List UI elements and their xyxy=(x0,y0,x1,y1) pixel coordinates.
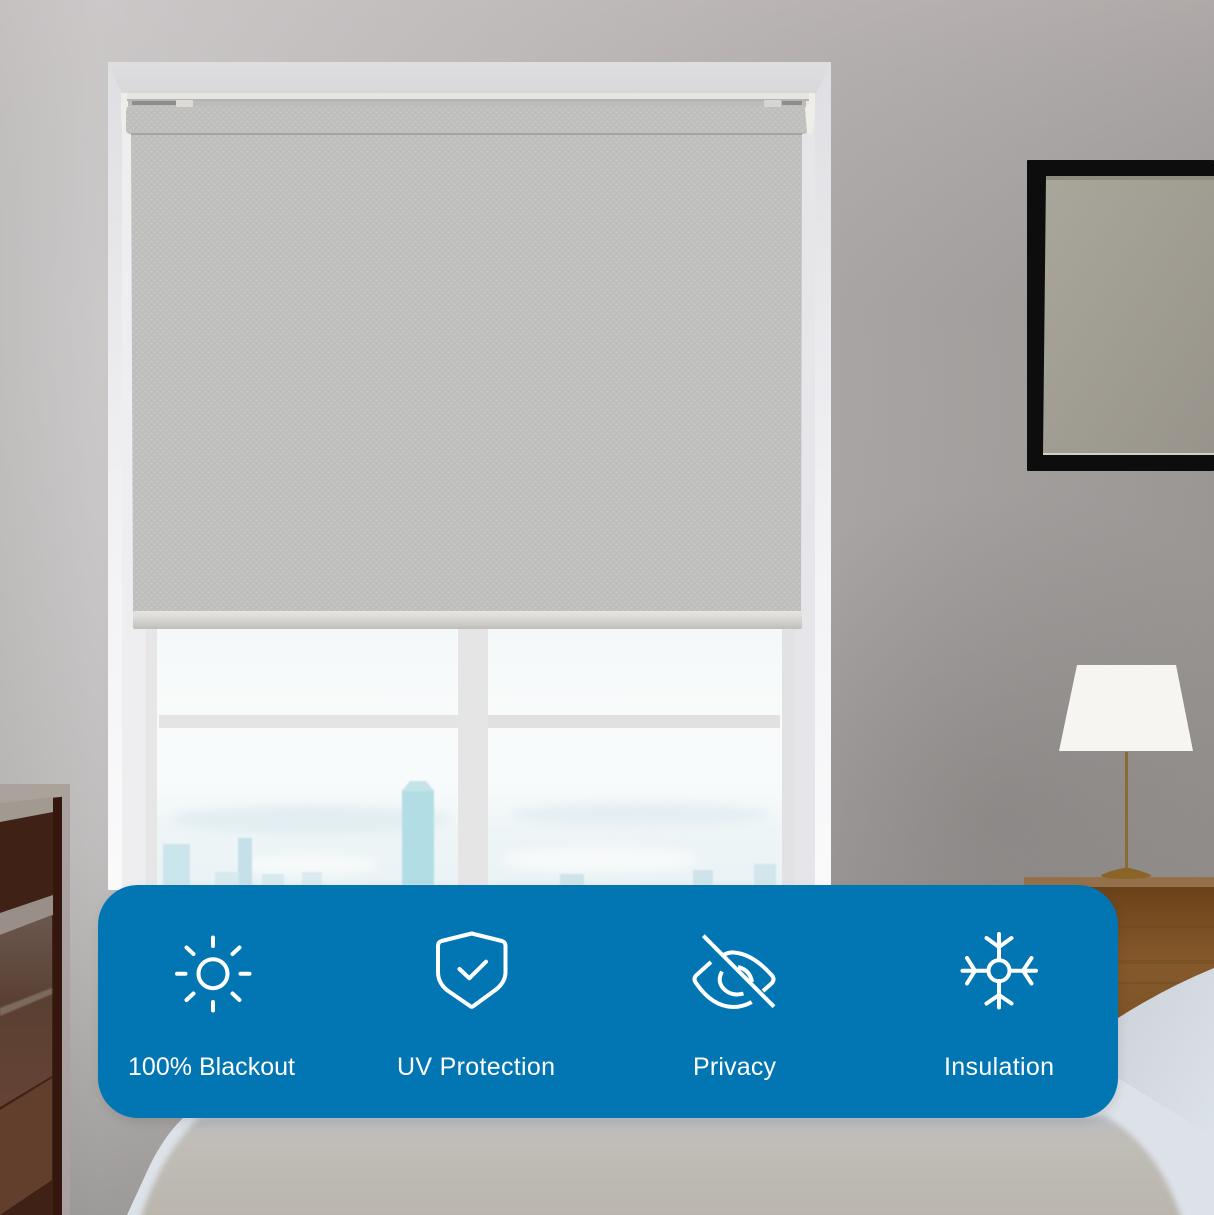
label: UV Protection: UV Protection xyxy=(397,1053,555,1081)
headrail with brackets xyxy=(121,93,815,134)
picture frame xyxy=(1027,160,1214,471)
icon: crossed-out eye xyxy=(694,936,774,1007)
dresser xyxy=(0,784,70,1215)
city haze xyxy=(170,803,770,875)
nightstand xyxy=(1024,877,1214,1036)
blind bottom rail xyxy=(133,611,802,629)
feature: Insulation xyxy=(944,934,1054,1081)
feature: UV Protection xyxy=(397,934,555,1081)
pillow xyxy=(1118,968,1214,1138)
icon: snowflake xyxy=(962,934,1036,1008)
feature: Privacy xyxy=(693,936,776,1081)
label: 100% Blackout: 100% Blackout xyxy=(128,1053,295,1081)
window muntins xyxy=(159,620,780,890)
roller blind fabric xyxy=(131,134,802,614)
panel shadow xyxy=(100,890,1118,1122)
window recess and frame xyxy=(108,62,831,890)
table lamp xyxy=(1059,665,1193,879)
blind roll xyxy=(126,106,808,135)
feature: 100% Blackout xyxy=(128,938,295,1081)
icon: sun xyxy=(177,938,250,1010)
label: Privacy: Privacy xyxy=(693,1053,776,1081)
window glass with city view xyxy=(157,620,782,890)
bed and bedding xyxy=(127,1070,1214,1215)
icon: shield with check xyxy=(438,934,506,1007)
label: Insulation: Insulation xyxy=(944,1053,1054,1081)
city skyline xyxy=(163,781,776,885)
feature panel xyxy=(98,885,1118,1118)
